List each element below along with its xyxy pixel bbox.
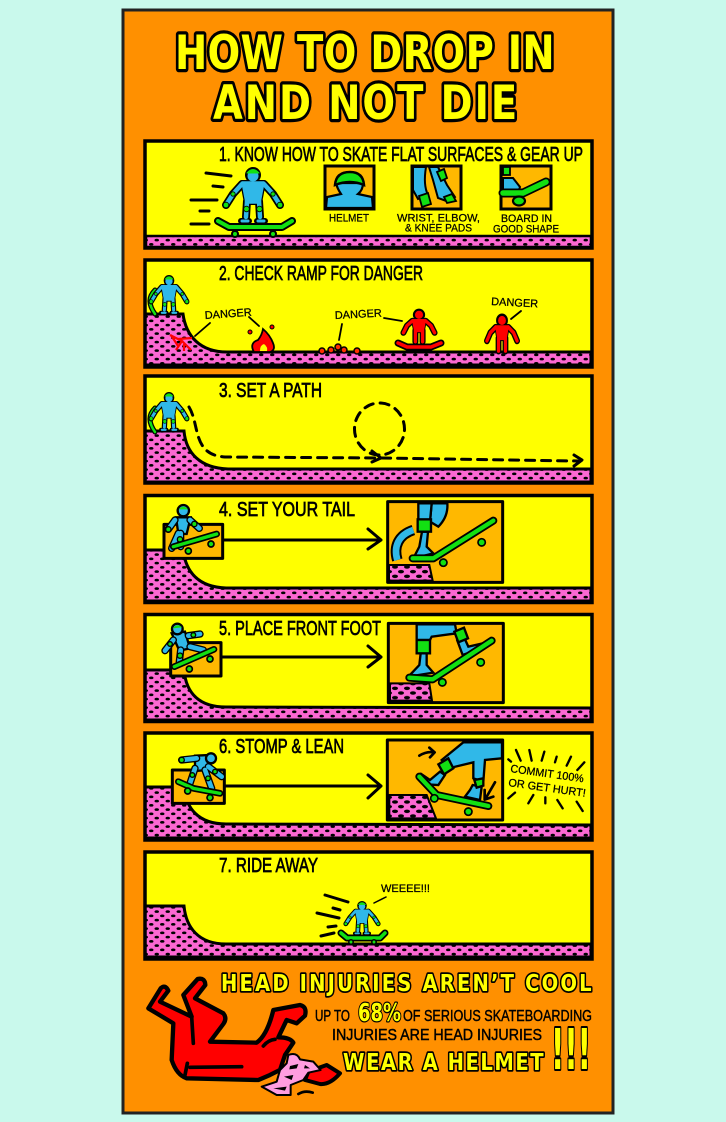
- speed lines: [191, 173, 231, 224]
- heading: step 7: 7. RIDE AWAY: [219, 855, 318, 877]
- dashed path with loop: [189, 403, 582, 466]
- panel: step 4 set your tail: [145, 496, 592, 602]
- fire: [248, 325, 274, 352]
- icon labels: BOARD IN: [501, 213, 552, 225]
- title: [175, 26, 555, 131]
- small inset and skater: [164, 505, 223, 558]
- skater on ledge: [149, 275, 189, 314]
- callout: commit: [508, 763, 586, 800]
- arrow: [225, 775, 381, 798]
- arrow: [222, 646, 381, 667]
- danger labels: DANGER: [335, 308, 382, 322]
- red skater: [398, 310, 441, 352]
- heading: step 1: 1. KNOW HOW TO SKATE FLAT SURFACES & GEAR UP: [219, 144, 583, 166]
- ramp: [145, 314, 591, 365]
- icon: pads: [412, 166, 461, 209]
- red person: [487, 315, 517, 351]
- illustration: fallen figure: [148, 979, 340, 1095]
- callout: commit: OR GET HURT!: [508, 777, 586, 800]
- icon: helmet: [325, 166, 374, 209]
- ground strip: [146, 236, 591, 247]
- heading: step 4: 4. SET YOUR TAIL: [219, 499, 355, 521]
- burst rays: [508, 750, 584, 811]
- warning text: UP TO: [315, 1008, 350, 1025]
- small inset and skater: [165, 624, 221, 676]
- rubble: [319, 344, 360, 354]
- warning text: 68%: [358, 998, 401, 1027]
- panel: step 3 set a path: [145, 376, 592, 483]
- ramp: [145, 550, 591, 601]
- speed lines: [317, 895, 348, 936]
- icon labels: GOOD SHAPE: [493, 224, 559, 236]
- jaw: [305, 1065, 340, 1084]
- warning text: WEAR A HELMET: [343, 1050, 544, 1076]
- crack: [170, 335, 192, 351]
- skater riding: [341, 901, 385, 944]
- title: AND NOT DIE: [213, 76, 517, 131]
- arrow: [224, 529, 381, 549]
- icon labels: WRIST, ELBOW,: [397, 212, 480, 224]
- panel: step 1 gear up: [145, 141, 592, 248]
- warning text: !!!: [551, 1018, 591, 1083]
- ramp: [145, 787, 591, 838]
- danger labels: DANGER: [204, 307, 252, 322]
- warning text: HEAD INJURIES AREN’T COOL: [221, 971, 592, 997]
- heading: step 3: 3. SET A PATH: [219, 380, 322, 402]
- skater on ledge: [149, 392, 189, 432]
- ramp: [145, 906, 591, 957]
- ramp: [145, 670, 591, 720]
- warning text: [221, 971, 592, 1083]
- danger labels: DANGER: [491, 296, 538, 310]
- big inset: tail: [388, 502, 503, 582]
- panel: step 5 place front foot: [145, 614, 592, 722]
- icon: skater with pads: [218, 167, 292, 237]
- icon: board: [501, 166, 551, 209]
- title: HOW TO DROP IN: [175, 26, 555, 81]
- warning text: INJURIES ARE HEAD INJURIES: [332, 1027, 542, 1044]
- panel: step 6 stomp and lean: [145, 733, 592, 840]
- icon labels: HELMET: [329, 212, 369, 224]
- big inset: front foot: [388, 623, 503, 703]
- panel: step 2 check ramp: [145, 260, 592, 367]
- heading: step 2: 2. CHECK RAMP FOR DANGER: [219, 263, 423, 285]
- ramp: [145, 431, 591, 482]
- page frame: [123, 10, 613, 1113]
- brain: [262, 1054, 321, 1095]
- heading: step 6: 6. STOMP & LEAN: [219, 736, 344, 758]
- big inset: stomp: [387, 740, 503, 820]
- exclamation: [374, 883, 430, 903]
- small inset and skater: [172, 753, 224, 803]
- callout: commit: COMMIT 100%: [510, 763, 585, 785]
- warning text: OF SERIOUS SKATEBOARDING: [403, 1008, 592, 1025]
- exclamation: WEEEE!!!: [381, 883, 430, 895]
- icon labels: & KNEE PADS: [405, 222, 472, 234]
- danger labels: [195, 296, 538, 340]
- panel: step 7 ride away: [145, 852, 592, 959]
- icon labels: [329, 212, 559, 236]
- heading: step 5: 5. PLACE FRONT FOOT: [219, 618, 381, 640]
